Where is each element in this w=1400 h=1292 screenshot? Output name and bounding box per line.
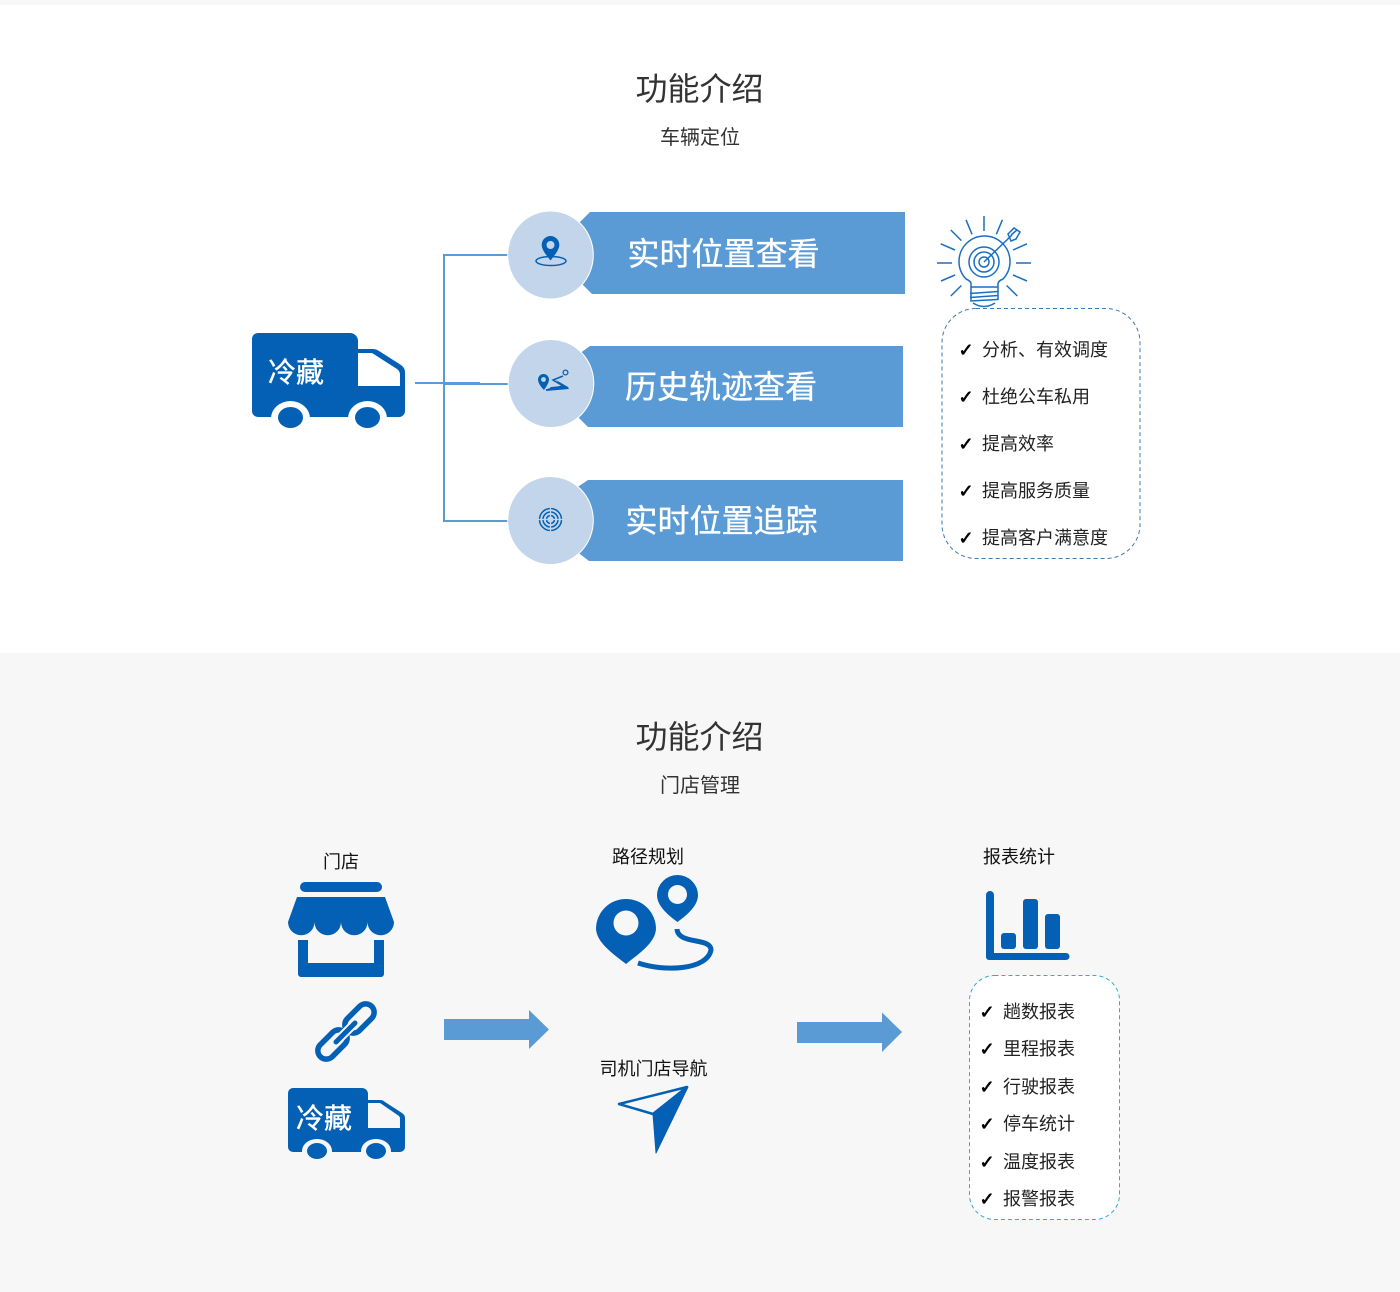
- icon: route pins: [596, 875, 711, 968]
- report items: ✓: [979, 1189, 995, 1210]
- banner: history track: [572, 346, 903, 427]
- report items: ✓: [979, 1039, 995, 1060]
- icon: lightbulb with target: [937, 216, 1031, 306]
- benefit items: 分析、有效调度: [982, 340, 1108, 360]
- report items: 趟数报表: [1003, 1002, 1075, 1022]
- benefit items: ✓: [958, 528, 974, 549]
- icon: chain link: [318, 1004, 374, 1059]
- circle icon: location pin: [508, 211, 593, 299]
- icon: refrigerated truck: 冷藏: [268, 357, 324, 388]
- label: route planning: 路径规划: [612, 847, 684, 867]
- banner: real-time tracking: 实时位置追踪: [626, 503, 818, 539]
- connector lines: [415, 255, 510, 521]
- icon: navigation arrow: [619, 1087, 688, 1153]
- label: report statistics: 报表统计: [983, 847, 1055, 867]
- circle icon: route history: [508, 340, 594, 428]
- top strip: [0, 0, 1400, 5]
- icon: refrigerated truck: [252, 333, 405, 428]
- banner: real-time position: 实时位置查看: [628, 236, 820, 272]
- icon: refrigerated truck small: [288, 1088, 405, 1160]
- benefit items: 提高效率: [982, 434, 1054, 454]
- benefit items: 提高客户满意度: [982, 528, 1108, 548]
- subheading: 门店管理: [660, 774, 740, 797]
- benefit items: 杜绝公车私用: [982, 387, 1090, 407]
- subheading: 车辆定位: [660, 126, 740, 149]
- report items: ✓: [979, 1077, 995, 1098]
- arrow: navigation to reports: [797, 1012, 902, 1052]
- benefit items: 提高服务质量: [982, 481, 1090, 501]
- callout: benefits list: [942, 308, 1140, 558]
- report items: 停车统计: [1003, 1114, 1075, 1134]
- circle icon: tracking target: [508, 476, 593, 564]
- report items: [979, 1002, 1075, 1210]
- panel: vehicle positioning: [0, 5, 1400, 653]
- label: store: 门店: [323, 852, 359, 872]
- report items: ✓: [979, 1114, 995, 1135]
- report items: 里程报表: [1003, 1039, 1075, 1059]
- report items: ✓: [979, 1152, 995, 1173]
- benefit items: ✓: [958, 387, 974, 408]
- banner: real-time position: [578, 212, 905, 294]
- benefit items: [958, 340, 1108, 549]
- report items: 报警报表: [1003, 1189, 1075, 1209]
- report items: 温度报表: [1003, 1152, 1075, 1172]
- icon: storefront: [288, 882, 394, 977]
- label: driver store navigation: 司机门店导航: [600, 1059, 708, 1079]
- callout: report list: [970, 976, 1120, 1220]
- report items: ✓: [979, 1002, 995, 1023]
- heading: 功能介绍: [635, 71, 764, 107]
- benefit items: ✓: [958, 434, 974, 455]
- banner: real-time tracking: [576, 480, 903, 561]
- icon: bar chart: [986, 891, 1070, 960]
- banner: history track: 历史轨迹查看: [625, 369, 817, 405]
- report items: 行驶报表: [1003, 1077, 1075, 1097]
- arrow: store to navigation: [444, 1010, 549, 1049]
- panel: store management: [0, 653, 1400, 1292]
- icon: refrigerated truck small: 冷藏: [296, 1103, 352, 1134]
- benefit items: ✓: [958, 340, 974, 361]
- heading: 功能介绍: [635, 719, 764, 755]
- benefit items: ✓: [958, 481, 974, 502]
